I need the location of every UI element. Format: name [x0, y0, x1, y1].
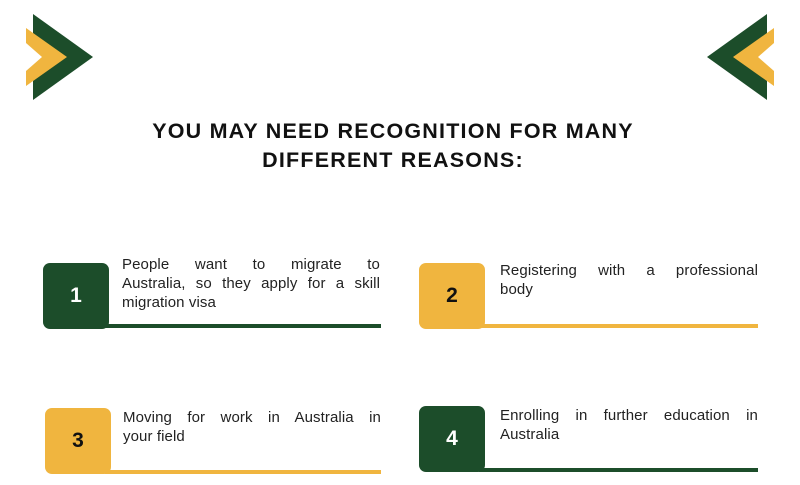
title: YOU MAY NEED RECOGNITION FOR MANY: [152, 119, 634, 143]
card 1: migration visa: [122, 294, 216, 311]
card 3: your field: [123, 428, 185, 445]
card 1: People want to migrate to: [122, 256, 380, 273]
card 3: Moving for work in Australia in: [123, 409, 381, 426]
card 1: Australia, so they apply for a skill: [122, 275, 380, 292]
card 3: [45, 408, 381, 474]
card 2: body: [500, 281, 533, 298]
title: [152, 119, 634, 172]
card 1: [43, 256, 381, 329]
card 4: [419, 406, 758, 472]
card 4: 4: [446, 427, 458, 450]
card 1: 1: [70, 284, 82, 307]
card 3: 3: [72, 429, 84, 452]
card 4: Enrolling in further education in: [500, 407, 758, 424]
icon: left chevrons: [26, 14, 93, 100]
title: DIFFERENT REASONS:: [262, 148, 524, 172]
card 2: Registering with a professional: [500, 262, 758, 279]
icon: right chevrons: [707, 14, 774, 100]
card 2: [419, 262, 758, 329]
card 2: 2: [446, 284, 458, 307]
card 4: Australia: [500, 426, 559, 443]
